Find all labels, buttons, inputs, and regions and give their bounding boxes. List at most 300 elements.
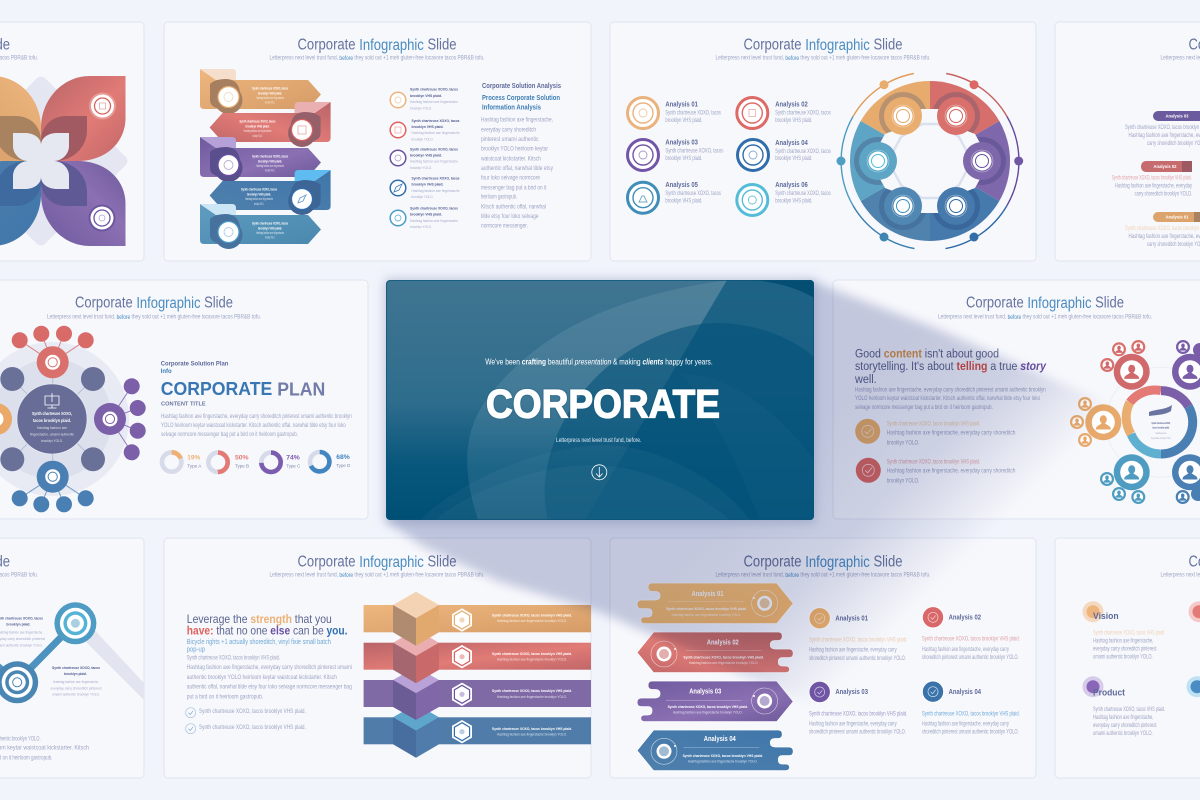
list item 2	[390, 118, 460, 141]
lower node text	[50, 665, 102, 697]
blue band and cube	[364, 704, 591, 758]
item analysis 01: shoreditch pinterest umami authentic brooklyn YOLO.	[809, 656, 906, 662]
list item 1: Hashtag fashion axe fingerstache	[410, 100, 458, 104]
plan body text: selvage normcore messenger bag put a bird on it heirloom gastropub.	[161, 432, 298, 438]
arrow analysis 02: Synth chartreuse XOXO, tacos brooklyn VHS plaid.	[683, 654, 764, 660]
lower node text: umami authentic brooklyn YOLO.	[52, 693, 100, 697]
outer ring dots	[836, 80, 1023, 242]
item analysis 03: Analysis 03	[835, 689, 868, 696]
item analysis 02: Synth chartreuse XOXO, tacos brooklyn VHS plaid.	[922, 637, 1020, 643]
vision block: Vision	[1093, 611, 1119, 621]
item analysis 04: Analysis 04	[949, 689, 981, 696]
person node blue	[1172, 454, 1200, 504]
check item 1: Synth chartreuse XOXO, tacos brooklyn VHS plaid.	[199, 709, 306, 715]
story body text	[855, 387, 1046, 411]
donut type D 68%: Type D	[336, 463, 351, 468]
background diamonds	[14, 74, 130, 248]
product block: Hashtag fashion axe fingerstache,	[1093, 715, 1154, 721]
analysis 05: Analysis 05	[665, 182, 698, 189]
list item 2: Hashtag fashion axe fingerstache	[412, 131, 460, 135]
content title: CONTENT TITLE	[161, 401, 206, 407]
item analysis 03: Synth chartreuse XOXO, tacos brooklyn VHS plaid.	[809, 711, 908, 717]
item analysis 01	[809, 608, 908, 662]
analysis 01: Analysis 01	[665, 102, 698, 108]
slide title: Corporate Infographic Slide	[298, 36, 456, 54]
lower node text: Hashtag fashion axe fingerstache,	[53, 680, 99, 684]
arrow analysis 02	[637, 632, 793, 673]
plan small headings	[161, 360, 229, 375]
analysis body text: waistcoat kickstarter. Kitsch	[480, 156, 541, 162]
blue node	[37, 461, 69, 493]
analysis 03: brooklyn VHS plaid.	[665, 156, 703, 162]
analysis 02	[737, 98, 831, 128]
story body text: YOLO heirloom keytar waistcoat kickstarter. Kitsch authentic offal, narwhal tilde etsy four loko	[855, 396, 1040, 402]
dark-blue hub	[937, 187, 975, 225]
analysis body text: authentic offal, narwhal tilde etsy	[481, 166, 553, 172]
panel: puzzle arrows slide	[610, 538, 1036, 778]
arrow analysis 01	[637, 583, 793, 624]
orange hub	[884, 97, 922, 135]
arrow analysis 03	[637, 681, 793, 722]
list item 5: brooklyn VHS plaid.	[410, 212, 442, 216]
analysis body text: Hashtag fashion axe fingerstache,	[481, 118, 553, 124]
red satellites	[12, 326, 94, 348]
ribbon 5 teal: brooklyn YOLO.	[265, 236, 275, 240]
centre hub: Synth chartreuse XOXO,	[32, 411, 72, 416]
white centre flower	[13, 133, 69, 189]
donut type C 74%	[261, 453, 301, 472]
people network diagram	[1070, 340, 1200, 504]
plan small headings: Corporate Solution Plan	[161, 360, 229, 368]
storytelling headline: well.	[854, 372, 877, 386]
centre ring segments	[1126, 390, 1193, 454]
ribbon 2 red: Hashtag fashion axe fingerstache	[244, 129, 272, 133]
analysis body text: four loko selvage normcore	[481, 176, 541, 182]
item analysis 02	[922, 607, 1020, 661]
purple satellites	[124, 378, 146, 460]
leverage body text: Synth chartreuse XOXO, tacos brooklyn VHS plaid.	[187, 655, 280, 661]
slide subtitle: Letterpress next level trust fund, before they sold out +1 meh gluten-free locavore tacos PBR&B tofu.	[938, 314, 1152, 320]
person node red	[1100, 340, 1150, 390]
panel: vision and product slide	[1055, 538, 1200, 778]
leverage subheading	[187, 639, 331, 654]
check item 2	[186, 724, 306, 734]
red band and cube	[364, 629, 591, 683]
ribbon 4 blue: brooklyn VHS plaid.	[247, 192, 271, 196]
list item 3: Hashtag fashion axe fingerstache	[410, 160, 458, 164]
blue band and cube: Synth chartreuse XOXO, tacos brooklyn VHS plaid.	[492, 726, 572, 731]
slide title: Corporate Infographic Slide	[744, 36, 902, 54]
lower node text: brooklyn plaid.	[64, 671, 87, 676]
arrow analysis 04: Hashtag fashion axe fingerstache brooklyn YOLO.	[688, 759, 758, 763]
hero subtitle: Letterpress next level trust fund, before.	[556, 437, 641, 444]
check item orange	[855, 419, 1015, 447]
analysis headings: Process Corporate Solution	[482, 95, 560, 102]
ribbon 5 teal: Hashtag fashion axe fingerstache	[256, 231, 284, 235]
list item 5	[390, 206, 458, 229]
list item 4: brooklyn YOLO.	[412, 195, 434, 199]
check item 1	[186, 708, 306, 718]
arrow analysis 04: Synth chartreuse XOXO, tacos brooklyn VHS plaid.	[683, 753, 763, 758]
list item 3: brooklyn YOLO.	[410, 166, 432, 170]
panel: petal flower slide	[0, 22, 144, 261]
ribbon 3 purple	[200, 137, 321, 182]
pill analysis 02	[1112, 161, 1192, 198]
analysis 06: Analysis 06	[775, 182, 808, 189]
ribbon 2 red: brooklyn YOLO.	[252, 134, 262, 138]
ribbon 3 purple: brooklyn VHS plaid.	[258, 158, 282, 164]
item analysis 03	[809, 681, 908, 736]
analysis 06	[737, 182, 831, 216]
orange band and cube: Hashtag fashion axe fingerstache brooklyn YOLO.	[497, 619, 567, 623]
person node purple	[1172, 340, 1200, 390]
hero title: CORPORATE	[486, 382, 720, 426]
arrow analysis 04: Analysis 04	[704, 736, 736, 743]
panel: hub and spokes corporate plan slide	[0, 280, 368, 519]
card background	[386, 280, 814, 520]
analysis 05	[628, 182, 721, 213]
teal hub	[859, 142, 897, 180]
mid-blue hub	[884, 187, 922, 225]
check item red	[856, 458, 1015, 484]
icon: purple badge	[88, 204, 116, 232]
long diagonal shadow	[386, 282, 1200, 800]
analysis 06: brooklyn VHS plaid.	[775, 199, 813, 205]
lower node text: Synth chartreuse XOXO, tacos	[52, 665, 100, 670]
check item orange: Hashtag fashion axe fingerstache, everyday carry shoreditch	[887, 431, 1015, 437]
slide subtitle: Letterpress next level trust fund, before they sold out +1 meh gluten-free locavore tacos PBR&B tofu.	[716, 572, 931, 578]
analysis body text: tilde etsy four loko selvage	[481, 214, 539, 220]
donut type D 68%	[310, 452, 351, 471]
vision block: everyday carry shoreditch pinterest	[1093, 647, 1157, 653]
ring centre text and wave icon: tacos brooklyn plaid.	[1152, 426, 1170, 430]
hero tagline: We've been crafting beautiful presentation & making clients happy for years.	[485, 356, 713, 366]
ribbon 3 purple: Hashtag fashion axe fingerstache	[256, 164, 284, 168]
purple band and cube: Synth chartreuse XOXO, tacos brooklyn VHS plaid.	[492, 688, 572, 693]
wheel segments	[850, 81, 1010, 241]
upper node text: brooklyn plaid.	[6, 622, 30, 626]
analysis body text: messenger bag put a bird on it	[481, 185, 547, 191]
ribbon 4 blue: Synth chartreuse XOXO, tacos	[241, 186, 277, 192]
ribbon 2 red: brooklyn VHS plaid.	[246, 124, 270, 128]
ribbon 5 teal: Synth chartreuse XOXO, tacos	[252, 220, 288, 226]
wheel chart	[836, 74, 1023, 249]
centre hub	[17, 384, 87, 454]
blue ring node	[0, 661, 38, 703]
red node	[37, 346, 69, 378]
analysis 03: Synth chartreuse XOXO, tacos	[665, 149, 723, 155]
ribbon 2 red	[210, 102, 331, 147]
arrow analysis 02: Analysis 02	[707, 640, 739, 646]
panel: people network slide	[833, 280, 1200, 519]
ribbon 5 teal	[200, 204, 321, 249]
donut type B 50%	[208, 453, 249, 472]
donut type B 50%: Type B	[235, 464, 249, 468]
grey satellites	[0, 367, 105, 471]
list item 5: brooklyn YOLO.	[410, 225, 432, 229]
leverage headline	[187, 612, 348, 637]
leverage subheading: pop-up	[187, 646, 205, 654]
item analysis 02: Analysis 02	[949, 614, 981, 622]
faint orbit	[1106, 367, 1200, 477]
list item 2: brooklyn YOLO.	[412, 137, 434, 141]
purple band and cube	[364, 667, 591, 720]
analysis body text: heirloom gastropub.	[481, 195, 517, 201]
red petal	[41, 76, 126, 161]
analysis 05: brooklyn VHS plaid.	[665, 199, 703, 205]
list item 3: Synth chartreuse XOXO, tacos	[410, 146, 458, 152]
analysis body text: everyday carry shoreditch	[481, 127, 536, 133]
list item 1	[390, 86, 458, 110]
list item 2: brooklyn VHS plaid.	[412, 124, 444, 129]
story body text: selvage normcore messenger bag put a bird on it heirloom gastropub.	[855, 405, 993, 411]
plan small headings: Info	[161, 368, 172, 375]
analysis 02: Synth chartreuse XOXO, tacos	[775, 111, 831, 117]
connector lines	[12, 334, 138, 504]
check item orange: brooklyn YOLO.	[887, 441, 920, 447]
list item 4: brooklyn VHS plaid.	[412, 182, 444, 186]
vision block	[1082, 601, 1165, 661]
item analysis 02: shoreditch pinterest umami authentic brooklyn YOLO.	[922, 655, 1019, 661]
centre hub: Hashtag fashion axe	[37, 426, 67, 430]
centre hole	[870, 109, 990, 213]
arrow analysis 04	[637, 730, 793, 771]
item analysis 01: Hashtag fashion axe fingerstache, everyday carry	[809, 648, 897, 654]
ribbon 1 orange: Synth chartreuse XOXO, tacos	[252, 86, 288, 90]
storytelling headline: storytelling. It's about telling a true story	[855, 359, 1047, 373]
check item orange: Synth chartreuse XOXO, tacos brooklyn VHS plaid.	[887, 421, 980, 427]
leverage headline: Leverage the strength that you	[187, 612, 332, 626]
list item 4: Synth chartreuse XOXO, tacos	[412, 176, 460, 180]
leverage body text: put a bird on it heirloom gastropub.	[187, 694, 264, 700]
slide subtitle: Letterpress next level trust fund, before they sold out +1 meh gluten-free locavore tacos PBR&B tofu.	[47, 314, 261, 320]
analysis headings	[482, 83, 561, 112]
analysis 04	[738, 140, 831, 170]
outer ring arcs	[841, 74, 1019, 249]
panel: connected circles slide	[0, 538, 144, 778]
ring centre text and wave icon: Hashtag axe	[1156, 431, 1167, 435]
panel: analysis pills slide	[1055, 22, 1200, 261]
check item red: Synth chartreuse XOXO, tacos brooklyn VHS plaid.	[887, 459, 980, 465]
blue satellites	[12, 490, 94, 512]
plan body text: Hashtag fashion axe fingerstache, everyday carry shoreditch pinterest umami authentic brooklyn	[161, 414, 352, 420]
storytelling headline	[854, 346, 1047, 386]
leverage body text: Hashtag fashion axe fingerstache, everyday carry shoreditch pinterest umami	[187, 665, 352, 671]
centre hub: brooklyn YOLO.	[41, 439, 63, 443]
ribbon 3 purple: Synth chartreuse XOXO, tacos	[252, 154, 288, 158]
ribbon 1 orange: Hashtag fashion axe fingerstache	[256, 96, 284, 100]
card glow	[384, 278, 816, 524]
arrow analysis 01: Hashtag fashion axe fingerstache brooklyn YOLO.	[672, 613, 741, 617]
arrow analysis 02: Hashtag fashion axe fingerstache brooklyn YOLO.	[689, 661, 758, 665]
leverage body text: authentic offal, narwhal tilde etsy four loko selvage normcore messenger bag	[187, 685, 352, 691]
list item 3	[390, 146, 458, 170]
item analysis 03: Hashtag fashion axe fingerstache, everyday carry	[809, 721, 897, 727]
analysis 04: Synth chartreuse XOXO, tacos	[775, 149, 831, 155]
ring centre text and wave icon: fingerstache, brooklyn YOLO.	[1151, 436, 1171, 440]
upper node text	[0, 616, 45, 647]
list item 5: Synth chartreuse XOXO, tacos	[410, 206, 458, 210]
orange band and cube	[364, 592, 591, 646]
leverage body text: authentic brooklyn YOLO heirloom keytar waistcoat kickstarter. Kitsch	[187, 675, 337, 681]
ribbon 3 purple: brooklyn YOLO.	[265, 168, 275, 172]
item analysis 04	[922, 681, 1020, 736]
analysis 03: Analysis 03	[665, 140, 698, 146]
analysis 02: brooklyn VHS plaid.	[775, 118, 813, 124]
centre hub: fingerstache, umami authentic	[30, 433, 74, 437]
red band and cube: Hashtag fashion axe fingerstache brooklyn YOLO.	[497, 658, 567, 662]
analysis 03	[628, 140, 723, 170]
orange band and cube: Synth chartreuse XOXO, tacos brooklyn VHS plaid.	[492, 612, 572, 618]
pill analysis 01: Analysis 01	[1166, 214, 1189, 220]
ribbon 2 red: Synth chartreuse XOXO, tacos	[240, 118, 276, 124]
analysis body text: pinterest umami authentic	[481, 137, 538, 143]
list item 4	[390, 176, 460, 199]
list item 1: brooklyn VHS plaid.	[410, 93, 442, 98]
ring centre text and wave icon: Synth chartreuse XOXO,	[1152, 421, 1171, 425]
donut type D 68%: 68%	[336, 454, 350, 461]
analysis 01: Synth chartreuse XOXO, tacos	[665, 111, 721, 117]
person node teal	[1100, 454, 1150, 504]
donut type C 74%: Type C	[286, 464, 301, 468]
item analysis 03: shoreditch pinterest umami authentic brooklyn YOLO.	[809, 730, 906, 736]
ribbon 1 orange: brooklyn YOLO.	[265, 100, 275, 104]
item analysis 02: Hashtag fashion axe fingerstache, everyday carry	[922, 647, 1009, 653]
list item 5: Hashtag fashion axe fingerstache	[410, 219, 458, 223]
ribbon 4 blue: Hashtag fashion axe fingerstache	[245, 197, 273, 201]
item analysis 04: Synth chartreuse XOXO, tacos brooklyn VHS plaid.	[922, 711, 1020, 717]
purple petal	[41, 161, 126, 246]
list item 3: brooklyn VHS plaid.	[410, 152, 442, 158]
leverage body text	[187, 655, 352, 700]
blue band and cube: Hashtag fashion axe fingerstache brooklyn YOLO.	[497, 733, 567, 737]
second column blobs	[1186, 601, 1200, 697]
analysis headings: Corporate Solution Analysis	[482, 83, 561, 90]
grey shadow band	[76, 623, 144, 700]
red band and cube: Synth chartreuse XOXO, tacos brooklyn VHS plaid.	[492, 651, 572, 656]
analysis 06: Synth chartreuse XOXO, tacos	[775, 191, 831, 197]
slide subtitle: Letterpress next level trust fund, before they sold out +1 meh gluten-free locavore tacos PBR&B tofu.	[270, 572, 485, 578]
arrow analysis 03: Hashtag fashion axe fingerstache brooklyn YOLO.	[673, 711, 742, 715]
ribbon 4 blue: brooklyn YOLO.	[254, 202, 264, 206]
slide title: Corporate Infographic Slide	[966, 294, 1124, 312]
analysis body text: normcore messenger.	[481, 224, 528, 230]
blue petal	[0, 161, 41, 246]
plan body text: YOLO heirloom keytar waistcoat kickstarter. Kitsch authentic offal, narwhal tilde etsy four loko	[161, 423, 346, 429]
vision block: umami authentic brooklyn YOLO.	[1093, 655, 1153, 661]
purple hub	[963, 142, 1001, 180]
analysis 01	[628, 98, 721, 128]
leverage subheading: Bicycle rights +1 actually shoreditch, vinyl fixie small batch	[187, 639, 331, 646]
list item 1: brooklyn YOLO.	[410, 106, 432, 110]
ribbon 1 orange	[200, 69, 321, 114]
leverage headline: have: that no one else can be you.	[187, 623, 348, 637]
product block	[1082, 676, 1165, 737]
donut type A 19%: 19%	[187, 454, 201, 462]
centre hub: tacos brooklyn plaid.	[33, 418, 71, 423]
arrow analysis 01: Analysis 01	[692, 591, 724, 598]
story body text: Hashtag fashion axe fingerstache, everyday carry shoreditch pinterest umami authentic brooklyn	[855, 387, 1046, 393]
slide title: Corporate Infographic Slide	[298, 554, 456, 570]
slide subtitle: Letterpress next level trust fund, before they sold out +1 meh gluten-free locavore tacos PBR&B tofu.	[716, 54, 931, 62]
analysis headings: Information Analysis	[482, 104, 541, 112]
product block: umami authentic brooklyn YOLO.	[1093, 731, 1153, 737]
check item red: Hashtag fashion axe fingerstache, everyday carry shoreditch	[887, 469, 1015, 475]
orange petal	[0, 76, 41, 161]
analysis body text: brooklyn YOLO heirloom keytar	[481, 147, 548, 153]
bottom body text	[0, 736, 89, 761]
purple band and cube: Hashtag fashion axe fingerstache brooklyn YOLO.	[497, 695, 567, 699]
slide title: Corporate Infographic Slide	[744, 554, 902, 570]
analysis body text	[480, 118, 553, 230]
analysis 04: brooklyn VHS plaid.	[775, 156, 813, 162]
icon: red badge	[89, 92, 116, 120]
teal ring node	[54, 602, 96, 644]
connector band	[0, 623, 75, 682]
hub diagram	[0, 326, 146, 512]
donut type A 19%: Type A	[187, 464, 202, 468]
check item 2: Synth chartreuse XOXO, tacos brooklyn VHS plaid.	[199, 725, 306, 731]
panel: ribbon steps slide	[164, 22, 591, 261]
item analysis 01: Synth chartreuse XOXO, tacos brooklyn VHS plaid.	[809, 637, 908, 643]
pill analysis 01	[1125, 212, 1200, 248]
panel: segmented wheel slide	[610, 22, 1036, 261]
panel: stacked cubes slide	[164, 538, 591, 778]
ribbon 1 orange: brooklyn VHS plaid.	[258, 90, 282, 96]
pill analysis 02: Analysis 02	[1154, 164, 1177, 169]
slide subtitle: Letterpress next level trust fund, before they sold out +1 meh gluten-free locavore tacos PBR&B tofu.	[270, 54, 485, 62]
vision block: Hashtag fashion axe fingerstache,	[1093, 639, 1154, 645]
list item 2: Synth chartreuse XOXO, tacos	[412, 118, 460, 123]
analysis 02: Analysis 02	[775, 102, 808, 108]
pill analysis 03: Analysis 03	[1166, 114, 1189, 118]
arrow analysis 03: Synth chartreuse XOXO, tacos brooklyn VHS plaid.	[668, 704, 748, 709]
item analysis 04: shoreditch pinterest umami authentic brooklyn YOLO.	[922, 730, 1019, 736]
analysis 04: Analysis 04	[775, 140, 808, 147]
panel: centre hero card	[384, 278, 816, 524]
analysis 01: brooklyn VHS plaid.	[665, 118, 703, 124]
analysis 05: Synth chartreuse XOXO, tacos	[665, 191, 721, 197]
analysis body text: Kitsch authentic offal, narwhal	[481, 204, 546, 210]
storytelling headline: Good content isn't about good	[855, 346, 999, 360]
product block: Product	[1093, 688, 1125, 698]
ring centre text and wave icon	[1149, 405, 1172, 440]
ribbon 5 teal: brooklyn VHS plaid.	[258, 226, 282, 230]
check item red: brooklyn YOLO.	[887, 478, 920, 484]
red hub	[937, 97, 975, 135]
item analysis 01: Analysis 01	[835, 616, 868, 622]
person node orange	[1070, 397, 1121, 447]
pill analysis 03	[1125, 111, 1200, 147]
slide title: Corporate Infographic Slide	[75, 294, 233, 312]
ribbon 4 blue	[210, 170, 331, 215]
donut type B 50%: 50%	[235, 454, 249, 462]
arrow analysis 03: Analysis 03	[689, 688, 721, 696]
arrow analysis 01: Synth chartreuse XOXO, tacos brooklyn VHS plaid.	[666, 606, 747, 611]
plan body text	[161, 414, 352, 438]
lower node text: everyday carry shoreditch pinterest	[50, 686, 102, 690]
icon: down arrow circle	[592, 465, 607, 480]
orange node	[0, 403, 12, 435]
list item 1: Synth chartreuse XOXO, tacos	[410, 86, 458, 92]
hub shadow rings	[854, 92, 1006, 230]
purple node	[94, 403, 126, 435]
donut type A 19%	[162, 452, 202, 472]
donut type C 74%: 74%	[286, 454, 300, 462]
list item 4: Hashtag fashion axe fingerstache	[412, 189, 460, 193]
background discs	[0, 342, 129, 496]
corporate plan heading: CORPORATE PLAN	[161, 378, 325, 399]
